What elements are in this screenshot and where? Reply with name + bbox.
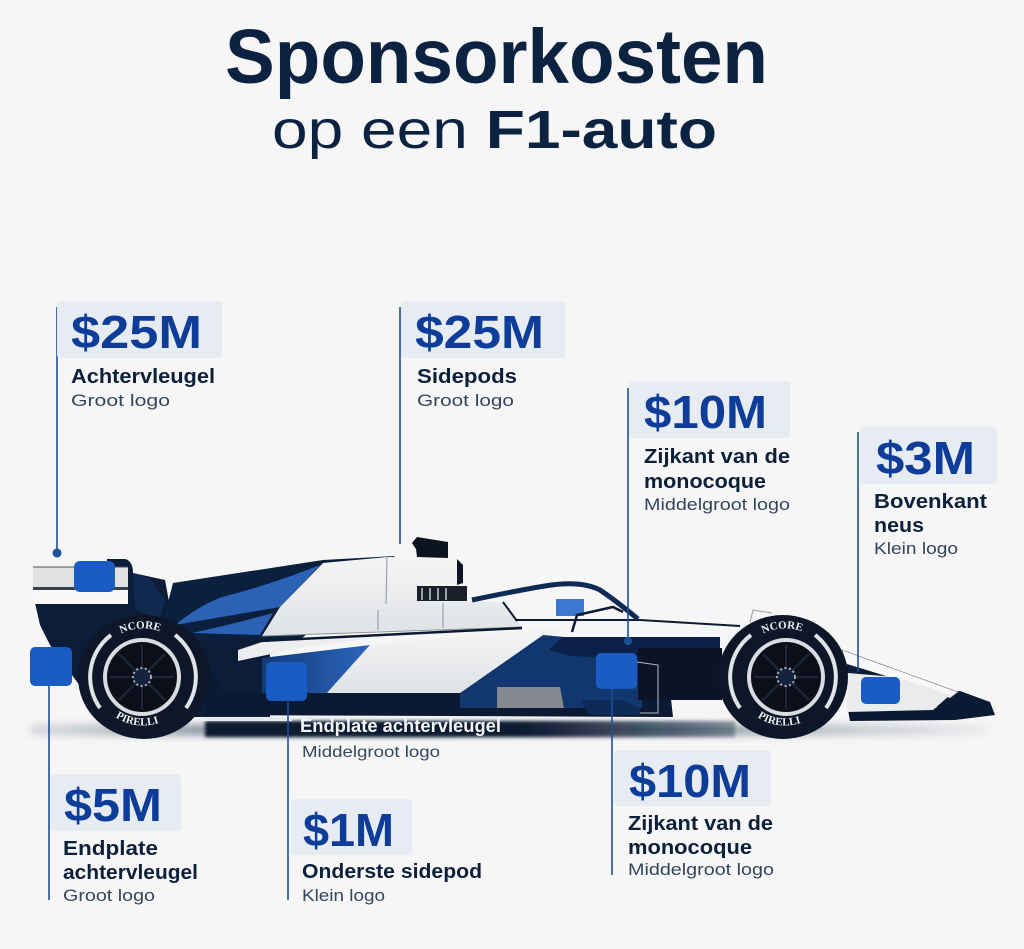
floor and lower body (197, 635, 722, 721)
ground shadow (30, 721, 990, 737)
callout: rear endplate $5M: Endplate (63, 838, 158, 860)
callout: monocoque lower $10M: monocoque (628, 837, 752, 859)
callout: rear wing $25M (52, 301, 222, 558)
rear wing and rear bodywork (33, 559, 270, 717)
callout: monocoque upper $10M: monocoque (644, 471, 766, 493)
callout: monocoque lower $10M (612, 689, 774, 879)
callout: lower sidepod $1M: Onderste sidepod (302, 861, 482, 883)
callout: nose top $3M: $3M (876, 432, 975, 484)
rear wheel: PIRELLI (116, 711, 159, 726)
callout: rear wing $25M: Groot logo (71, 391, 170, 410)
callout: monocoque upper $10M: Zijkant van de (644, 446, 790, 468)
callout: nose top $3M: Bovenkant (874, 491, 987, 513)
sponsor area: endplate (30, 647, 72, 686)
nose and cockpit (472, 584, 772, 637)
callout: lower sidepod $1M: Klein logo (302, 886, 385, 905)
label on car shadow: Middelgroot logo (302, 744, 440, 761)
callout: lower sidepod $1M (288, 700, 482, 905)
engine cover (163, 537, 522, 642)
front wheel: NCORE (760, 621, 803, 634)
label on car shadow: Endplate achtervleugel (300, 716, 501, 736)
sponsor area: rear wing (74, 561, 115, 592)
callout: rear wing $25M: Achtervleugel (71, 366, 215, 388)
rear wheel: NCORE (118, 621, 161, 634)
title (225, 14, 768, 160)
callout: monocoque upper $10M: $10M (644, 386, 767, 438)
callout: rear endplate $5M (49, 686, 198, 905)
sidepod (238, 626, 570, 693)
label on car shadow (300, 716, 501, 761)
front wheel: PIRELLI (758, 711, 801, 726)
callout: nose top $3M: neus (874, 515, 924, 537)
front wing and nose tip (842, 650, 995, 721)
callout: nose top $3M (858, 427, 997, 672)
sponsor area: nose (861, 677, 900, 704)
callout: sidepods $25M: Groot logo (417, 391, 514, 410)
callout: sidepods $25M: $25M (415, 306, 544, 358)
callout: rear wing $25M: $25M (71, 306, 202, 358)
title line 1: Sponsorkosten (225, 14, 768, 100)
title line 2: op een F1-auto (272, 100, 717, 160)
callout: monocoque upper $10M: Middelgroot logo (644, 495, 790, 514)
callout: sidepods $25M: Sidepods (417, 366, 517, 388)
callout: lower sidepod $1M: $1M (303, 804, 394, 856)
rear wheel (78, 615, 210, 739)
callout: rear endplate $5M: achtervleugel (63, 862, 198, 884)
sponsor area: lower sidepod (266, 662, 307, 701)
F1 car illustration (33, 537, 995, 739)
callout: monocoque lower $10M: Zijkant van de (628, 813, 773, 835)
callout: rear endplate $5M: $5M (64, 779, 162, 831)
callout: monocoque upper $10M (624, 381, 790, 645)
callout: monocoque lower $10M: $10M (629, 755, 751, 807)
callout: sidepods $25M (400, 301, 565, 544)
front wheel (722, 615, 848, 739)
callout: rear endplate $5M: Groot logo (63, 886, 155, 905)
sponsor area: monocoque (596, 653, 637, 689)
callout: nose top $3M: Klein logo (874, 539, 958, 558)
callout: monocoque lower $10M: Middelgroot logo (628, 860, 774, 879)
